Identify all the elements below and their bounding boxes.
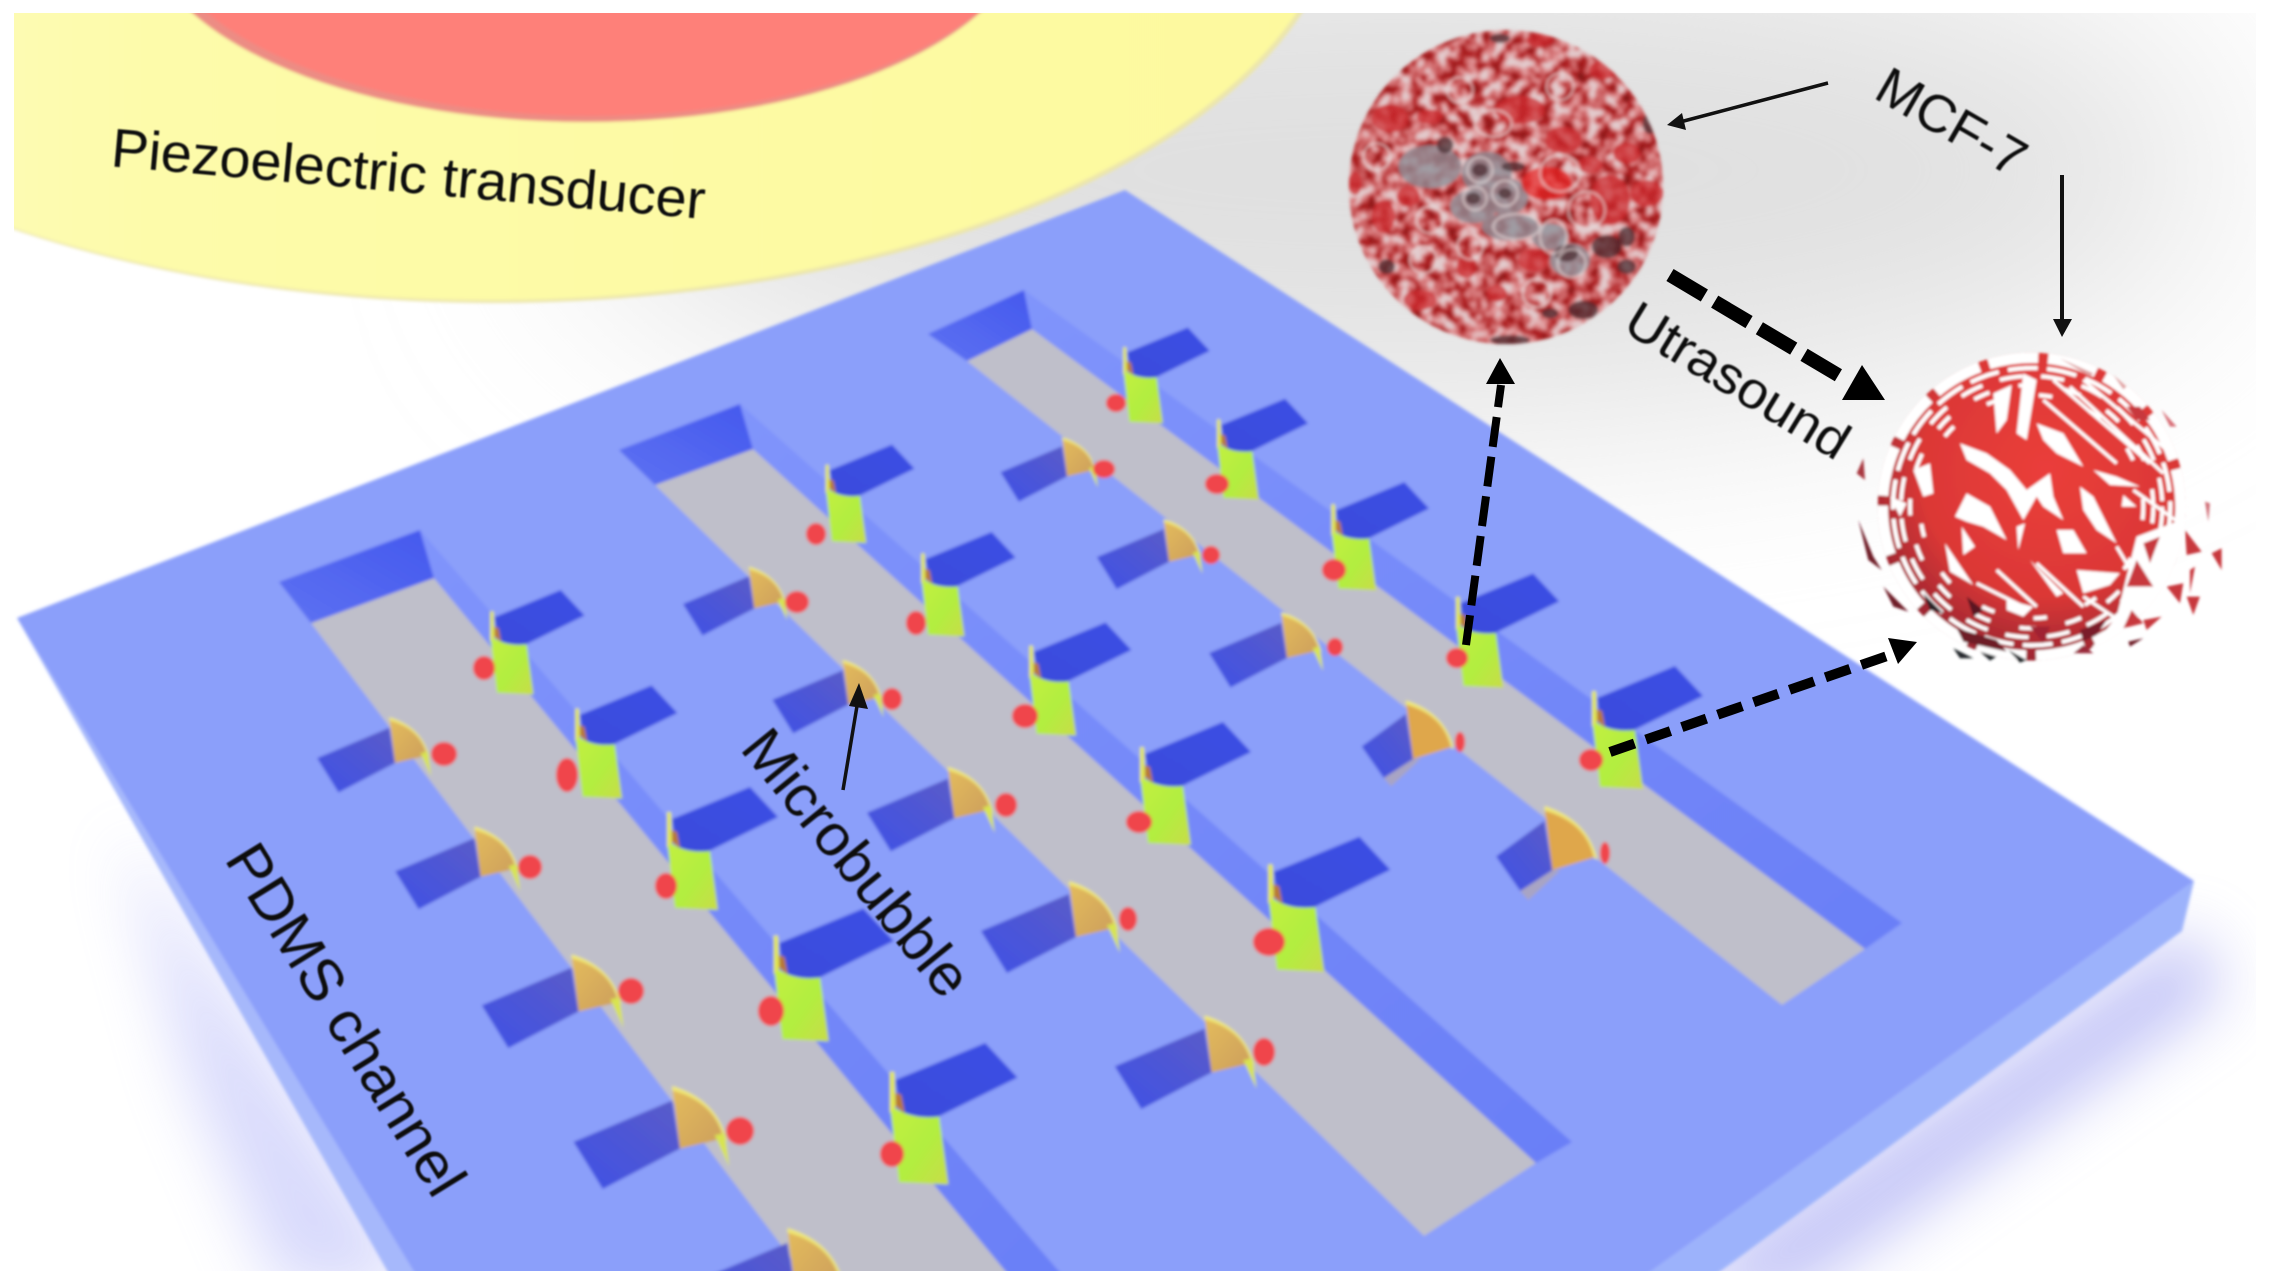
arrow: microbubble label [843,683,868,790]
white perimeter breakup [1882,357,2190,667]
channel C [928,290,1902,1005]
channel A [279,530,1075,1283]
label: Utrasound: Utrasound [1615,291,1860,472]
fragmented cell after ultrasound [1857,353,2222,667]
gray core of cell [1398,145,1590,277]
orange microbubble sites [317,437,1597,1283]
label: PDMS channel: PDMS channel [213,832,478,1207]
red sphere body [1878,353,2190,667]
green microbubble sites [490,327,1703,1185]
piezoelectric transducer [0,0,1344,303]
arrow: MCF-7 to fragmented cell [2053,175,2072,337]
channel B [619,404,1572,1236]
red cells at microbubbles [431,394,1610,1167]
label: Piezoelectric transducer: Piezoelectric transducer [109,116,708,231]
label: Microbubble: Microbubble [729,716,984,1010]
plate shadow [126,876,2241,1271]
arrow: MCF-7 to intact cell [1667,83,1828,130]
arrow: microbubble site to intact cell [1466,358,1515,645]
white fragment gaps [1890,373,2140,617]
arrow: microbubble site to fragmented cell [1610,638,1917,752]
outer shards [1857,358,2222,630]
arrow: ultrasound [1670,275,1885,400]
MCF-7 cell before ultrasound [1345,26,1667,348]
label: MCF-7: MCF-7 [1866,56,2037,189]
